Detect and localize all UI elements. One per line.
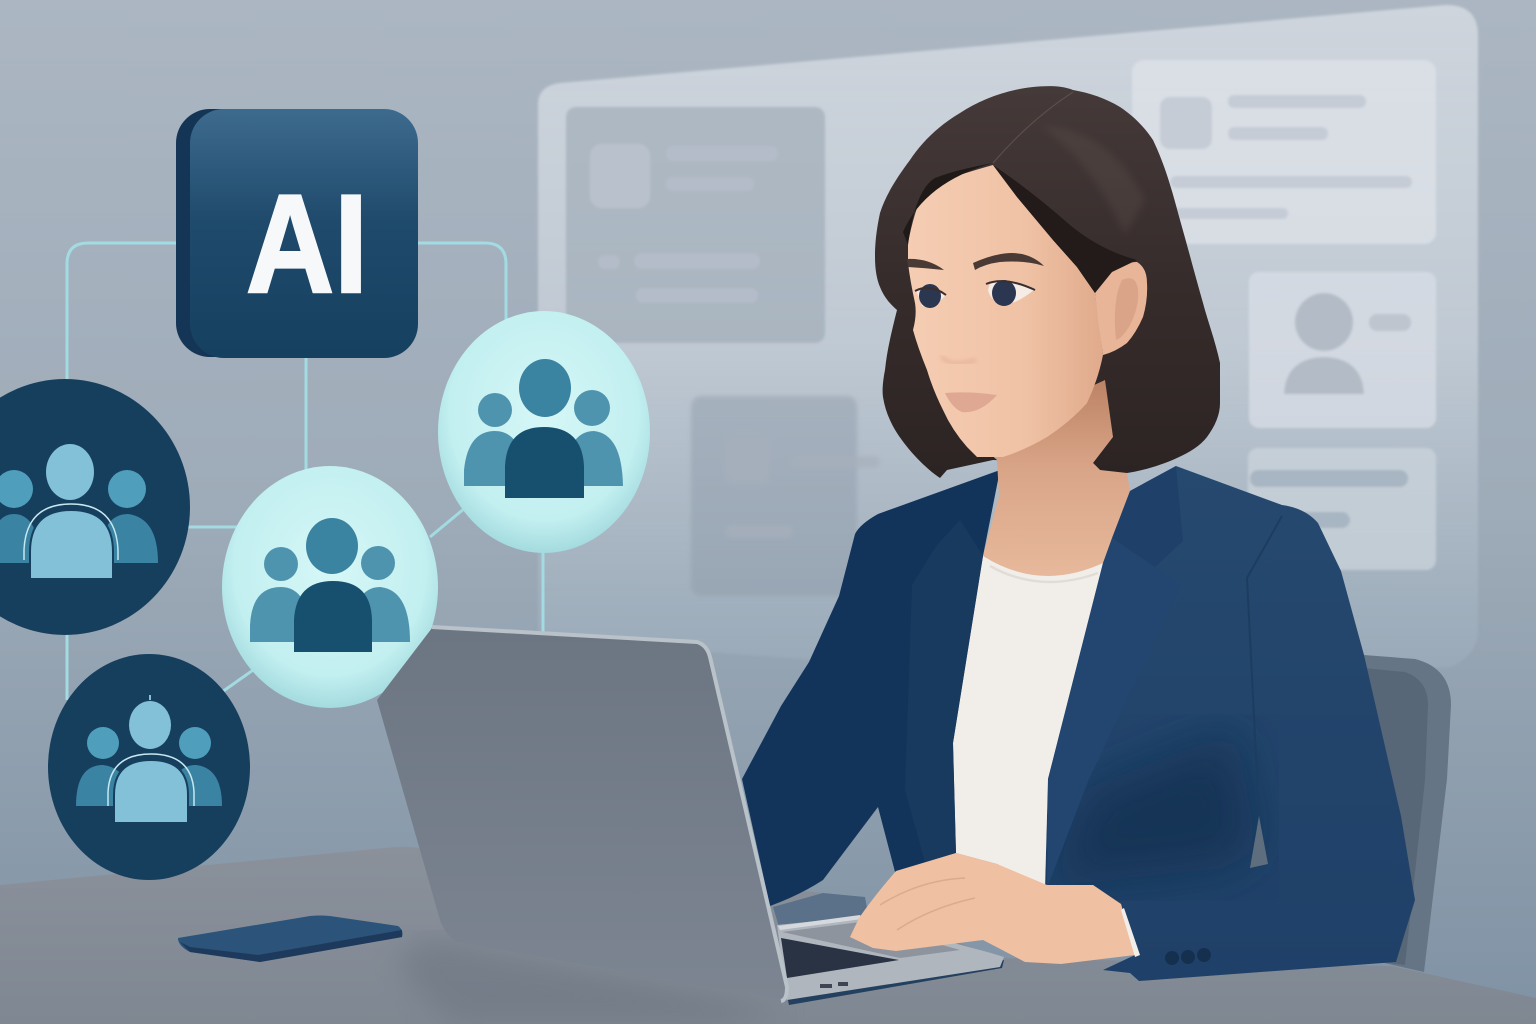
laptop lid — [377, 627, 787, 1001]
card: top left — [566, 107, 825, 343]
blazer: left arm and front — [742, 470, 1000, 906]
blazer: right body and sleeve — [1045, 466, 1415, 981]
shirt — [953, 556, 1103, 888]
icon: dark audience circle bottom — [48, 654, 250, 880]
connector lines between AI tile and audience circles — [67, 243, 543, 700]
cuff buttons — [1165, 948, 1211, 965]
shirt cuff — [1121, 908, 1140, 957]
nose — [941, 356, 976, 363]
left lapel shading — [905, 520, 983, 862]
fringe shadow — [903, 163, 993, 245]
blazer: sleeve seam — [1247, 516, 1282, 816]
keyboard — [781, 938, 899, 978]
part line — [993, 92, 1073, 163]
laptop shadow on desk — [400, 939, 790, 1024]
card: profile — [1249, 272, 1436, 428]
card: bottom centre — [691, 396, 880, 596]
ports — [820, 984, 848, 986]
card: bottom right — [1248, 448, 1436, 570]
card: top right — [1132, 60, 1436, 244]
icon: AI tile — [176, 109, 418, 358]
shirt collar — [990, 566, 1098, 582]
hair highlight — [1040, 125, 1145, 235]
blazer: lower body shading — [1050, 730, 1258, 885]
panel: faded dashboard behind the woman — [538, 5, 1478, 680]
chair gap between body and sleeve — [1250, 816, 1268, 868]
lips — [945, 392, 997, 412]
neck — [975, 380, 1130, 580]
laptop deck and keyboard — [773, 893, 1004, 1005]
icon: light audience circle centre — [222, 466, 438, 708]
ear — [1095, 262, 1147, 355]
chair — [1364, 655, 1451, 972]
phone — [178, 916, 402, 962]
right upper collar — [1112, 466, 1183, 567]
hand — [850, 853, 1140, 964]
eyes — [916, 288, 945, 307]
right lapel — [1047, 538, 1181, 888]
eyebrows — [907, 259, 944, 270]
hair — [875, 86, 1220, 478]
icon: dark audience circle left — [0, 379, 190, 635]
hair strand edge — [993, 165, 1137, 293]
desk — [0, 847, 1536, 1024]
face — [908, 165, 1103, 457]
ear inner — [1115, 278, 1138, 340]
AI label: AI — [246, 165, 368, 322]
icon: light audience circle right — [438, 311, 650, 553]
woman — [742, 86, 1415, 981]
